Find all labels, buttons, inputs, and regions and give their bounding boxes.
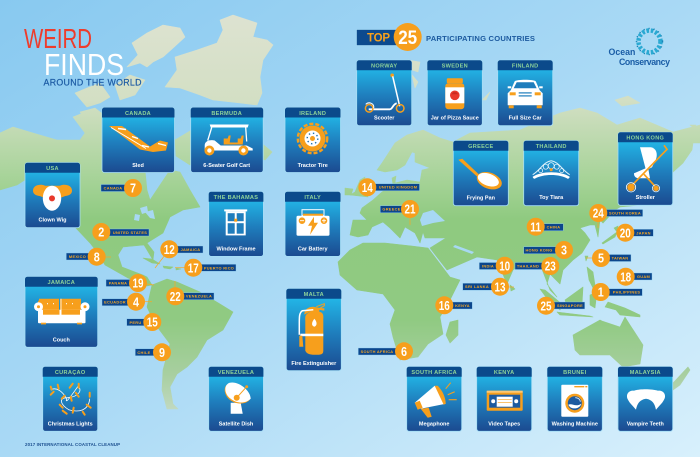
marker 16: Kenya: 16 xyxy=(439,298,450,313)
icon: clown wig xyxy=(33,185,72,211)
marker 11: China: CHINA xyxy=(547,225,560,230)
marker 8: Mexico xyxy=(66,248,111,266)
card: Malta fire extinguisher xyxy=(286,289,341,371)
marker 25: Singapore: SINGAPORE xyxy=(557,303,583,308)
marker 9: Chile: 9 xyxy=(159,345,165,360)
marker 25: Singapore xyxy=(537,297,585,315)
card: Curacao Christmas lights: Christmas Lights xyxy=(48,422,93,428)
card: Brunei washing machine: Washing Machine xyxy=(552,422,598,428)
footer credit: 2017 INTERNATIONAL COASTAL CLEANUP xyxy=(25,442,120,447)
icon: Christmas lights xyxy=(51,384,91,415)
marker 11: China xyxy=(527,218,563,236)
marker 1: Philippines xyxy=(592,283,642,301)
card: Hong Kong stroller: Stroller xyxy=(636,195,656,201)
card: Curacao Christmas lights xyxy=(43,367,98,431)
icon: fire extinguisher xyxy=(299,304,324,355)
marker 6: South Africa xyxy=(358,342,413,360)
title: WEIRD xyxy=(24,23,92,54)
card: South Africa megaphone: SOUTH AFRICA xyxy=(411,370,457,376)
marker 5: Taiwan xyxy=(586,249,631,267)
card: Curacao Christmas lights: CURAÇAO xyxy=(55,370,86,376)
marker 12: Jamaica: 12 xyxy=(164,242,175,257)
marker 2: United States xyxy=(92,223,149,241)
marker 9: Chile: CHILE xyxy=(137,350,151,355)
marker 1: Philippines: 1 xyxy=(598,285,604,300)
icon: washing machine xyxy=(561,385,588,417)
icon: video tapes xyxy=(487,391,523,411)
card: Kenya video tapes xyxy=(477,367,532,431)
icon: car battery xyxy=(296,210,330,236)
marker 22: Venezuela xyxy=(166,281,214,305)
card: USA clown wig: USA xyxy=(46,166,59,172)
marker 15: Peru: 15 xyxy=(147,315,158,330)
marker 24: South Korea: SOUTH KOREA xyxy=(609,210,641,216)
card: Sweden pizza sauce xyxy=(427,60,482,126)
icon: vampire teeth xyxy=(627,389,665,410)
marker 16: Kenya xyxy=(435,296,472,314)
card: Bermuda golf cart xyxy=(191,108,263,172)
marker 7: Canada xyxy=(101,179,142,197)
marker 18: Guam xyxy=(617,268,652,286)
marker 3: Hong Kong xyxy=(524,241,573,259)
icon: jar of pizza sauce xyxy=(445,78,464,109)
logo: Ocean Conservancy: Conservancy xyxy=(619,57,670,67)
logo: Ocean Conservancy: Ocean xyxy=(608,47,635,57)
card: Finland full size car xyxy=(498,60,553,126)
marker 7: Canada: CANADA xyxy=(104,186,122,190)
marker 14: United Kingdom: 14 xyxy=(362,180,373,195)
marker 23: Thailand: THAILAND xyxy=(517,264,539,268)
marker 9: Chile xyxy=(135,343,171,361)
marker 19: Panama: PANAMA xyxy=(109,280,127,286)
card: Italy car battery: Car Battery xyxy=(298,246,328,252)
marker 22: Venezuela: 22 xyxy=(170,289,181,304)
marker 15: Peru: PERU xyxy=(129,320,142,325)
marker 22: Venezuela: VENEZUELA xyxy=(186,294,212,299)
marker 12: Jamaica: JAMAICA xyxy=(181,247,200,252)
card: Italy car battery xyxy=(285,192,340,256)
title: AROUND THE WORLD xyxy=(44,78,142,88)
card: Bermuda golf cart: BERMUDA xyxy=(211,111,242,117)
card: Finland full size car: Full Size Car xyxy=(509,116,543,122)
card: South Africa megaphone: Megaphone xyxy=(419,422,449,428)
card: Sweden pizza sauce: Jar of Pizza Sauce xyxy=(431,116,479,122)
card: Brunei washing machine: BRUNEI xyxy=(563,370,587,376)
marker 24: South Korea: 24 xyxy=(593,206,604,221)
marker 24: South Korea xyxy=(589,204,643,228)
top 25 heading: PARTICIPATING COUNTRIES xyxy=(426,34,535,43)
card: Jamaica couch xyxy=(25,277,98,347)
title xyxy=(24,23,142,88)
icon: tiara xyxy=(533,161,570,179)
marker 4: Ecuador: ECUADOR xyxy=(104,300,126,305)
marker 4: Ecuador xyxy=(102,293,152,311)
card: Norway scooter: Scooter xyxy=(374,116,395,122)
icon: sled xyxy=(109,126,168,152)
marker 4: Ecuador: 4 xyxy=(133,294,140,309)
marker 18: Guam: 18 xyxy=(620,269,631,284)
marker 21: Greece: GREECE xyxy=(382,207,401,212)
card: Venezuela satellite dish xyxy=(209,367,263,431)
marker 8: Mexico: MEXICO xyxy=(69,254,86,259)
card: Brunei washing machine xyxy=(547,367,602,431)
card: Canada sled xyxy=(102,108,174,172)
card: The Bahamas window frame: THE BAHAMAS xyxy=(214,195,258,201)
title: FINDS xyxy=(44,47,124,82)
marker 21: Greece: 21 xyxy=(404,202,416,217)
marker 17: Puerto Rico xyxy=(175,259,236,277)
marker 11: China: 11 xyxy=(530,219,541,234)
card: Malaysia vampire teeth: MALAYSIA xyxy=(630,370,661,376)
card: Ireland tractor tire: Tractor Tire xyxy=(298,163,328,169)
card: The Bahamas window frame xyxy=(209,192,263,256)
card: Greece frying pan: GREECE xyxy=(468,144,494,150)
icon: frying pan xyxy=(458,159,504,193)
card: Thailand toy tiara: Toy Tiara xyxy=(539,195,564,201)
marker 5: Taiwan: 5 xyxy=(598,251,604,266)
card: Venezuela satellite dish: VENEZUELA xyxy=(218,370,254,376)
card: Kenya video tapes: KENYA xyxy=(494,370,514,376)
card: Kenya video tapes: Video Tapes xyxy=(488,422,520,428)
marker 17: Puerto Rico: 17 xyxy=(188,260,199,275)
marker 13: Sri Lanka: 13 xyxy=(494,279,506,294)
marker 16: Kenya: KENYA xyxy=(455,303,470,308)
card: Canada sled: CANADA xyxy=(125,111,151,117)
marker 13: Sri Lanka: SRI LANKA xyxy=(465,284,489,289)
marker 19: Panama: 19 xyxy=(132,276,144,291)
card: Malta fire extinguisher: MALTA xyxy=(304,292,324,298)
card: Sweden pizza sauce: SWEDEN xyxy=(442,64,468,70)
card: Malaysia vampire teeth xyxy=(618,367,673,431)
icon: couch xyxy=(34,299,90,324)
icon: window frame xyxy=(224,209,247,235)
marker 18: Guam: GUAM xyxy=(637,274,650,279)
marker 14: United Kingdom: UNITED KINGDOM xyxy=(379,185,417,190)
icon: tire xyxy=(298,124,327,153)
marker 14: United Kingdom xyxy=(358,178,420,196)
card: Greece frying pan: Frying Pan xyxy=(467,196,496,202)
card: The Bahamas window frame: Window Frame xyxy=(216,246,256,252)
card: Hong Kong stroller xyxy=(618,132,673,205)
card: Thailand toy tiara xyxy=(524,141,579,206)
marker 23: Thailand: 23 xyxy=(545,259,556,274)
card: USA clown wig: Clown Wig xyxy=(38,218,67,224)
card: Venezuela satellite dish: Satellite Dish xyxy=(219,422,254,428)
marker 10: India: 10 xyxy=(499,258,510,273)
card: Hong Kong stroller: HONG KONG xyxy=(626,136,664,142)
card: Bermuda golf cart: 6-Seater Golf Cart xyxy=(203,163,250,169)
logo: Ocean Conservancy xyxy=(608,28,670,67)
top 25 heading: TOP xyxy=(367,32,390,44)
marker 23: Thailand xyxy=(515,257,559,275)
marker 13: Sri Lanka xyxy=(463,278,514,296)
marker 3: Hong Kong: 3 xyxy=(561,243,567,258)
marker 19: Panama xyxy=(106,274,154,292)
card: Ireland tractor tire xyxy=(285,108,340,172)
marker 25: Singapore: 25 xyxy=(540,298,552,313)
marker 17: Puerto Rico: PUERTO RICO xyxy=(204,265,234,270)
marker 6: South Africa: 6 xyxy=(401,344,407,359)
marker 20: Japan: JAPAN xyxy=(636,230,651,235)
marker 3: Hong Kong: HONG KONG xyxy=(525,248,553,253)
marker 20: Japan: 20 xyxy=(620,225,631,240)
icon: stroller xyxy=(626,145,667,192)
card: Italy car battery: ITALY xyxy=(304,195,321,201)
card: Thailand toy tiara: THAILAND xyxy=(536,144,567,150)
marker 7: Canada: 7 xyxy=(130,181,136,196)
marker 15: Peru xyxy=(127,313,161,331)
card: Finland full size car: FINLAND xyxy=(512,64,539,70)
card: Greece frying pan xyxy=(453,141,508,206)
card: Jamaica couch: Couch xyxy=(53,338,70,344)
marker 1: Philippines: PHILIPPINES xyxy=(613,290,640,295)
icon: scooter xyxy=(365,74,404,112)
card: Jamaica couch: JAMAICA xyxy=(48,280,75,286)
marker 10: India xyxy=(479,257,514,275)
card: USA clown wig xyxy=(25,163,80,228)
card: South Africa megaphone xyxy=(407,367,462,431)
marker 10: India: INDIA xyxy=(482,264,494,268)
marker 12: Jamaica xyxy=(155,240,203,268)
marker 2: United States: UNITED STATES xyxy=(113,230,147,235)
top 25 heading: 25 xyxy=(398,27,417,49)
inland seas xyxy=(134,206,474,254)
card: Ireland tractor tire: IRELAND xyxy=(299,111,326,117)
card: Norway scooter: NORWAY xyxy=(371,64,397,70)
card: Malta fire extinguisher: Fire Extinguisher xyxy=(291,361,337,367)
top 25 heading xyxy=(356,23,535,51)
marker 6: South Africa: SOUTH AFRICA xyxy=(361,349,393,354)
card: Norway scooter xyxy=(357,60,412,126)
marker 8: Mexico: 8 xyxy=(94,249,100,264)
card: Canada sled: Sled xyxy=(132,163,144,169)
marker 20: Japan xyxy=(616,224,653,242)
marker 21: Greece xyxy=(380,200,419,225)
icon: golf cart xyxy=(204,124,253,156)
icon: car xyxy=(508,80,543,108)
card: Malaysia vampire teeth: Vampire Teeth xyxy=(627,422,665,428)
icon: satellite dish xyxy=(225,382,251,414)
icon: megaphone xyxy=(415,383,457,418)
marker 5: Taiwan: TAIWAN xyxy=(612,256,628,260)
marker 2: United States: 2 xyxy=(98,225,104,240)
